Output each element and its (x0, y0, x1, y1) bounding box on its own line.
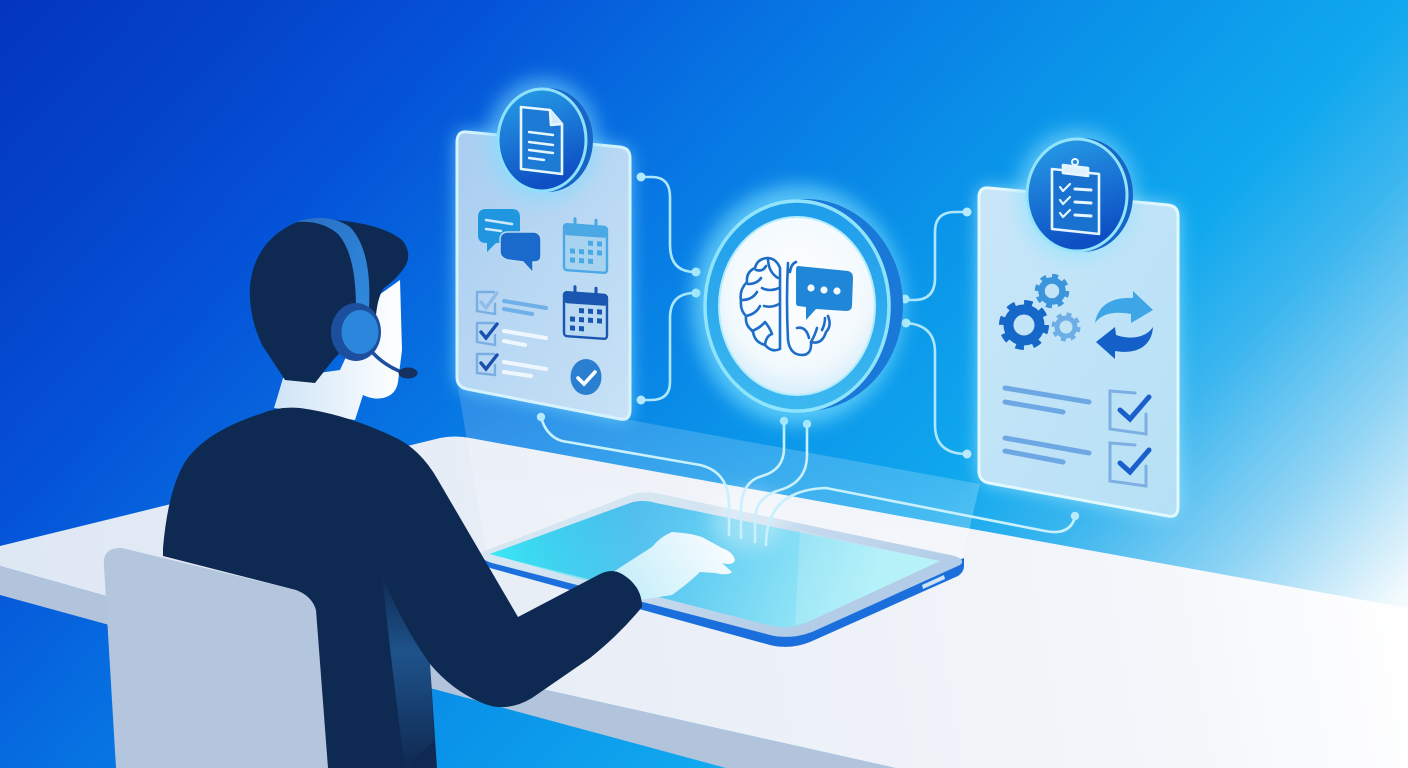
connector end dots (537, 172, 1079, 520)
person (163, 218, 735, 768)
tablet frame (480, 492, 962, 637)
tablet side button (922, 575, 945, 589)
hair (250, 220, 408, 383)
connector: left panel top to AI hub (641, 177, 695, 272)
connector: left panel to tablet (541, 417, 729, 535)
icon: chat bubbles (478, 209, 541, 273)
icon: gears (1002, 276, 1078, 347)
right panel glow (979, 188, 1178, 516)
document glyph (521, 107, 562, 174)
connector lines (541, 177, 1075, 545)
speech dots (807, 284, 841, 295)
tablet screen (490, 501, 940, 627)
connector: left panel bottom to AI hub (641, 293, 695, 400)
AI hub disc: brain and speech (692, 185, 904, 425)
connector: AI hub to right panel top (905, 212, 967, 300)
touch point glow (710, 490, 786, 550)
clipboard glyph (1052, 159, 1099, 234)
connector: tablet to right panel (766, 488, 1075, 545)
hand (610, 532, 735, 600)
chair (104, 548, 332, 768)
tablet blue rim (480, 545, 964, 647)
desk (0, 436, 1408, 768)
torso and arm (163, 408, 642, 768)
screen light band (795, 531, 940, 625)
headset band (296, 218, 369, 308)
connector: AI hub to tablet B (755, 424, 807, 542)
headset earcup (331, 303, 381, 361)
face and neck (274, 280, 402, 420)
icon disc: document (487, 78, 599, 202)
speech bubble (796, 266, 853, 320)
connector: AI hub to tablet A (741, 421, 784, 538)
left panel glow (457, 132, 630, 419)
right panel body (979, 188, 1178, 516)
arm shading (382, 575, 434, 768)
microphone (398, 368, 418, 378)
icon disc: clipboard (1017, 129, 1137, 261)
desk front face (0, 566, 896, 768)
panel: left document card (457, 132, 630, 419)
panel: right task card (979, 188, 1178, 516)
icon: dark calendar (564, 286, 607, 339)
icon: light calendar (564, 218, 607, 273)
desk top surface (0, 436, 1408, 768)
icon: check badge (570, 359, 602, 395)
tablet (480, 492, 964, 647)
connector: AI hub to right panel bottom (906, 323, 967, 454)
holographic projection beam (458, 388, 980, 636)
left panel body (457, 132, 630, 419)
icon: refresh arrows (1095, 291, 1153, 359)
icon: checklist (477, 292, 546, 376)
brain icon (741, 258, 830, 355)
microphone boom (373, 353, 404, 373)
task lines and checkboxes (1005, 388, 1149, 486)
earcup center (342, 310, 378, 354)
screen cyan reflection (490, 503, 660, 590)
